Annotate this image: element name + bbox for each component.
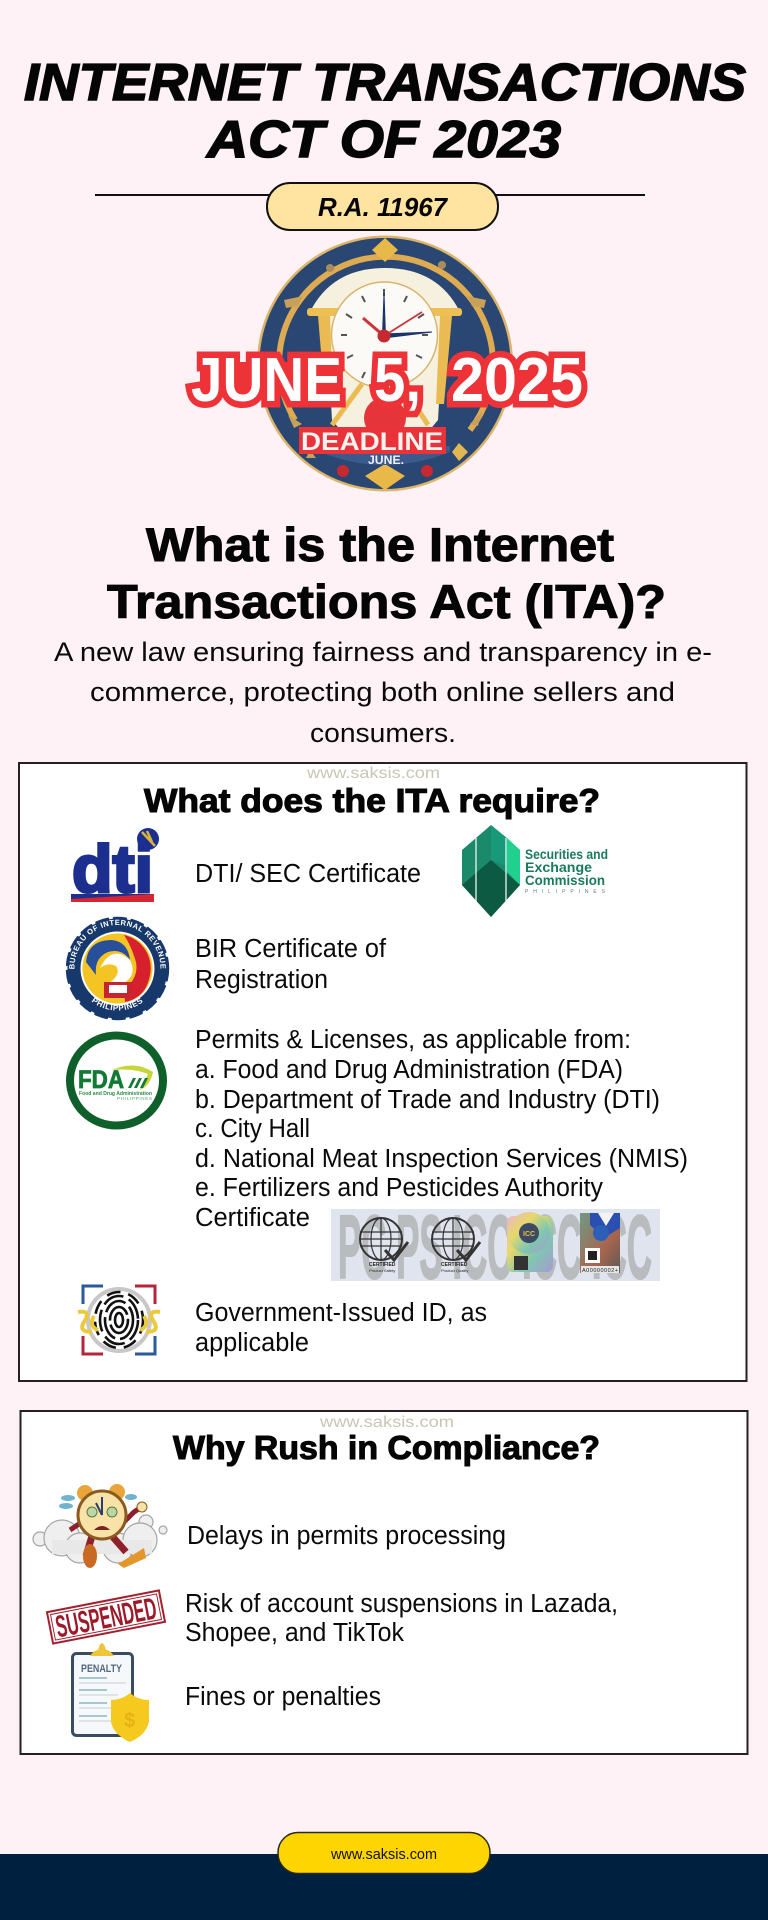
date: June 5, 2025 (191, 346, 583, 415)
icon: suspended stamp: SUSPENDED (53, 1591, 159, 1644)
panel: why rush in compliance (20, 1411, 748, 1754)
icon: BIR seal: PHILIPPINES (92, 998, 142, 1011)
heading: what is the ITA: Transactions Act (ITA)? (107, 575, 666, 628)
text: government ID: applicable (195, 1329, 309, 1357)
republic act badge: R.A. 11967 (318, 192, 449, 222)
description text: A new law ensuring fairness and transparency in e- (54, 637, 712, 667)
text: delays: Delays in permits processing (187, 1522, 506, 1550)
icon: SEC logo: Exchange (525, 859, 592, 875)
text: government ID: Government-Issued ID, as (195, 1299, 487, 1327)
text: permits and licenses list: c. City Hall (195, 1115, 310, 1143)
icon: FDA logo: PHILIPPINES (117, 1096, 152, 1101)
panel: what does the ITA require (18, 762, 748, 1382)
footer band (0, 1854, 768, 1920)
date: June 5, 2025: JUNE (191, 346, 342, 415)
text: BIR certificate: Registration (195, 966, 328, 994)
text: account suspensions (185, 1590, 618, 1647)
description text: commerce, protecting both online sellers and (90, 677, 675, 707)
text: permits and licenses list: b. Department of Trade and Industry (DTI) (195, 1086, 660, 1114)
icon: FDA logo: FDA (78, 1066, 124, 1094)
icon: penalty clipboard: $ (124, 1710, 135, 1732)
watermark: www.saksis.com (306, 765, 440, 782)
icon: fingerprint ID (78, 1286, 160, 1354)
description text (54, 637, 712, 748)
clock emblem with deadline (191, 236, 583, 492)
seal: ICC hologram (507, 1212, 553, 1272)
title (24, 54, 746, 169)
text: BIR certificate: BIR Certificate of (195, 935, 387, 963)
icon: suspended stamp (47, 1589, 165, 1646)
text: permits and licenses list: a. Food and Drug Administration (FDA) (195, 1056, 623, 1084)
footer website pill (278, 1832, 490, 1874)
small june label: JUNE. (368, 453, 404, 467)
text: permits and licenses list: Certificate (195, 1204, 310, 1232)
heading: what is the ITA (107, 518, 666, 628)
text: permits and licenses list (195, 1026, 688, 1232)
emblem: arch and columns (307, 268, 462, 439)
icon: SEC logo (462, 825, 608, 917)
icon: BIR seal: BUREAU OF INTERNAL REVENUE (69, 920, 166, 969)
icon: SEC logo: PHILIPPINES (525, 889, 606, 895)
text: permits and licenses list: Permits & Licenses, as applicable from: (195, 1026, 631, 1054)
icon: running alarm clock (33, 1484, 167, 1568)
seal: certified globe two: CERTIFIED (441, 1262, 468, 1268)
text: account suspensions: Risk of account suspensions in Lazada, (185, 1590, 618, 1618)
seal: certified globe one: CERTIFIED (369, 1262, 396, 1268)
panel heading: What does the ITA require? (144, 782, 600, 819)
title: INTERNET TRANSACTIONS (24, 54, 746, 112)
seal: ICC hologram: ICC (523, 1231, 535, 1238)
icon: DTI logo: dti (72, 832, 153, 907)
text: permits and licenses list: d. National Meat Inspection Services (NMIS) (195, 1145, 688, 1173)
text: fines: Fines or penalties (185, 1683, 381, 1711)
seal: certified globe one (360, 1218, 408, 1273)
title: ACT OF 2023 (205, 111, 561, 169)
icon: SEC logo: Securities and (525, 846, 608, 862)
emblem: clock face (332, 282, 438, 388)
icon: FDA logo: Food and Drug Administration (79, 1091, 153, 1097)
icon: penalty clipboard (72, 1643, 149, 1742)
seal: certified globe one: Product Safety (369, 1268, 395, 1273)
icon: BIR seal (66, 916, 170, 1020)
deadline tag: DEADLINE (301, 428, 443, 456)
seal: certified globe two (432, 1218, 480, 1273)
text: account suspensions: Shopee, and TikTok (185, 1619, 404, 1647)
description text: consumers. (310, 718, 456, 748)
icon: FDA logo (70, 1036, 163, 1126)
seal: ICC blue badge: A00000002+ (582, 1268, 618, 1274)
text: BIR certificate (195, 935, 387, 994)
seal: certified globe two: Product Quality (441, 1268, 468, 1273)
footer website pill: www.saksis.com (330, 1847, 437, 1863)
watermark: www.saksis.com (319, 1414, 454, 1431)
emblem: outer dial (257, 236, 513, 492)
republic act badge (95, 183, 645, 230)
seal: ICC blue badge (580, 1213, 620, 1274)
icon: penalty clipboard: PENALTY (81, 1663, 123, 1675)
panel heading: Why Rush in Compliance? (173, 1429, 600, 1466)
text: government ID (195, 1299, 487, 1357)
date: June 5, 2025: 5, (374, 346, 421, 415)
date: June 5, 2025: 2025 (451, 346, 583, 415)
text: permits and licenses list: e. Fertilizers and Pesticides Authority (195, 1174, 603, 1202)
text: DTI SEC certificate: DTI/ SEC Certificate (195, 860, 421, 888)
icon: SEC logo: Commission (525, 872, 605, 888)
heading: what is the ITA: What is the Internet (146, 518, 614, 571)
